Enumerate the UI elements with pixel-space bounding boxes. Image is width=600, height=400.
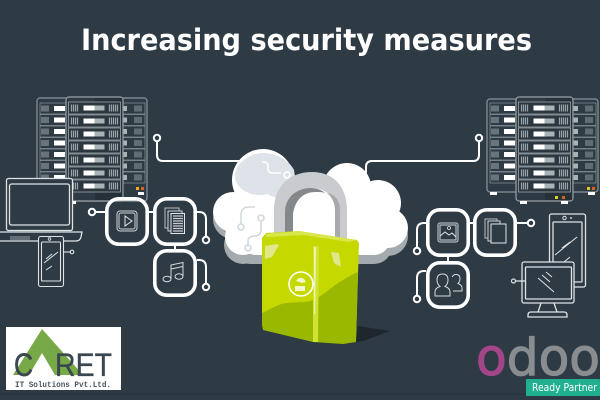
logo tagline: IT Solutions Pvt.Ltd. bbox=[15, 380, 111, 390]
lock highlights bbox=[265, 244, 279, 259]
lock emblem bbox=[289, 272, 313, 296]
lock ground shadow bbox=[355, 326, 390, 342]
laptop icon bbox=[0, 178, 82, 241]
shackle bbox=[274, 172, 347, 243]
tile: folders bbox=[469, 210, 534, 255]
Caret logo: RET bbox=[55, 347, 112, 383]
lock body bbox=[262, 231, 359, 342]
tile: people bbox=[414, 256, 468, 307]
lock top rim bbox=[265, 231, 357, 242]
left connector to cloud bbox=[154, 135, 260, 161]
circuit traces bbox=[238, 162, 290, 251]
right connector to cloud bbox=[366, 135, 482, 173]
cloud body bbox=[213, 149, 408, 255]
logo triangle bbox=[13, 329, 83, 375]
padlock bbox=[262, 172, 390, 344]
cloud shadow bbox=[213, 199, 408, 264]
phone icon right bbox=[550, 214, 586, 287]
title: Increasing security measures bbox=[81, 23, 532, 57]
Odoo logo: odoo bbox=[476, 329, 600, 388]
lock lower shade bbox=[262, 272, 358, 344]
tile: music bbox=[155, 245, 209, 295]
tile: documents bbox=[148, 199, 209, 244]
phone icon left bbox=[38, 236, 74, 286]
tile: image bbox=[414, 210, 468, 255]
logo name: C bbox=[14, 347, 33, 383]
Ready Partner badge bbox=[526, 379, 600, 396]
monitor icon bbox=[512, 262, 574, 317]
lock centre band bbox=[313, 246, 319, 342]
tile: video play bbox=[89, 199, 147, 244]
cloud bbox=[213, 149, 408, 264]
Caret logo bbox=[6, 327, 121, 390]
cloud left lobe tint bbox=[235, 153, 297, 202]
right server rack bbox=[487, 97, 598, 204]
left server rack bbox=[37, 97, 147, 201]
